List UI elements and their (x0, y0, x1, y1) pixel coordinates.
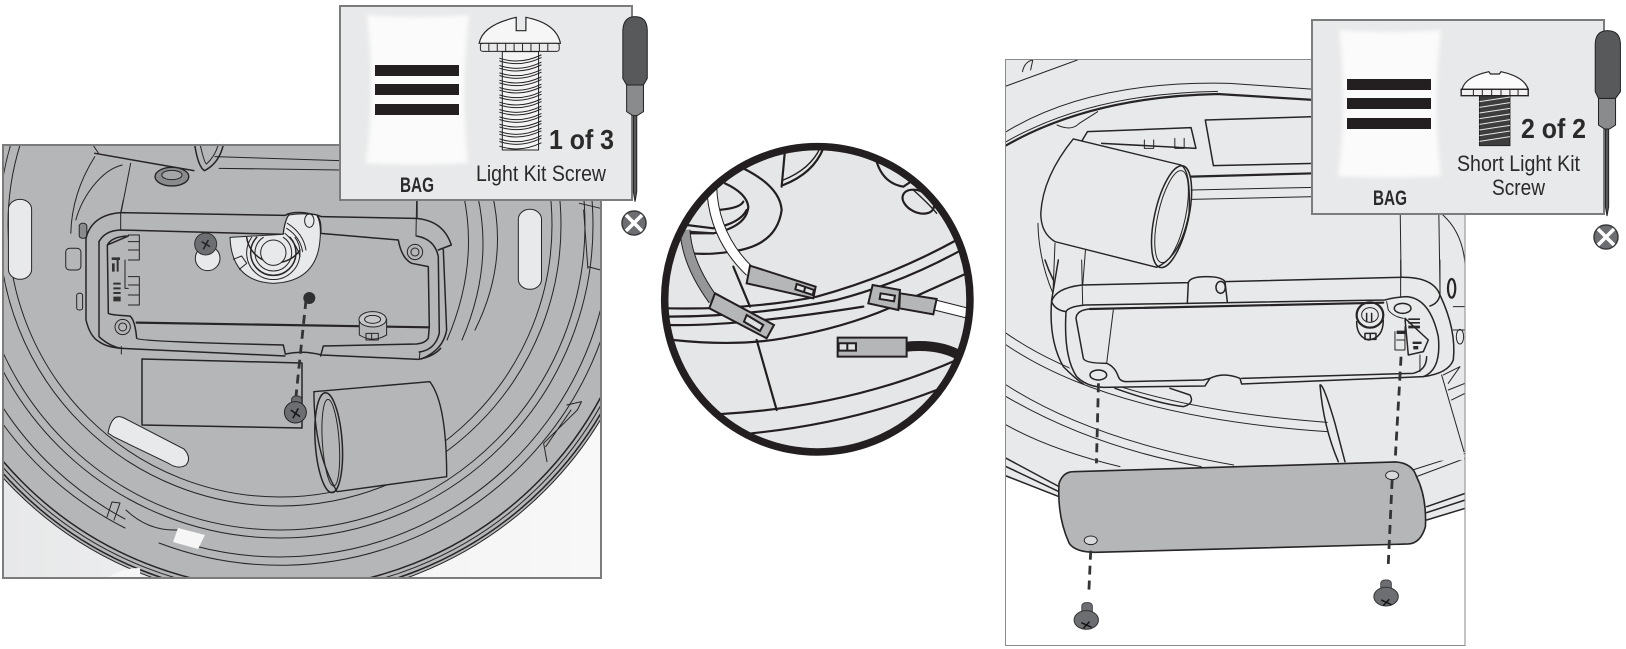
lamp socket (1041, 139, 1199, 270)
dashed guides upper (1096, 357, 1401, 463)
icon: phillips symbol 2 (1594, 225, 1618, 249)
screw name: Light Kit Screw (476, 161, 606, 186)
bag icon (366, 15, 469, 164)
icon: phillips symbol 1 (622, 211, 646, 235)
connector 3 (868, 285, 937, 314)
label rectangle (1205, 117, 1315, 166)
lamp socket (312, 382, 447, 493)
connectors and board (112, 235, 139, 305)
circuit board (1395, 318, 1428, 372)
side tab on rim (544, 402, 582, 462)
side knob (66, 223, 87, 310)
dashed guide (296, 300, 306, 396)
screw icon (1461, 72, 1528, 146)
background lines (667, 148, 967, 433)
eyelets (115, 244, 423, 335)
circle outline (665, 147, 970, 452)
dashed guides lower (1089, 480, 1392, 595)
panel frame (3, 145, 601, 578)
fixture hub (230, 214, 320, 283)
post (359, 312, 387, 340)
plate holes (1084, 471, 1399, 545)
connector 1 (747, 266, 816, 298)
count: 1 of 3 (549, 124, 614, 155)
post (1357, 302, 1383, 340)
mounting screw (195, 233, 220, 271)
screw hole (303, 292, 315, 304)
legend: light kit screw (340, 6, 632, 200)
icon: screwdriver 2 (1595, 31, 1620, 216)
upper arcs (1006, 60, 1465, 293)
white highlights on rim (108, 528, 205, 578)
right white wire (935, 305, 968, 313)
screw A (1074, 603, 1098, 629)
fixture disc (4, 146, 600, 577)
icon: screwdriver 1 (623, 17, 647, 202)
panel: wire connector detail (665, 147, 970, 452)
housing bracket (86, 200, 451, 359)
cover plate (1059, 462, 1426, 629)
fixture disc (1006, 60, 1465, 535)
second lamp socket (1320, 279, 1465, 463)
panel: left fixture underside (2, 144, 602, 579)
connector 2 (709, 293, 774, 338)
top screw boss (155, 167, 189, 186)
screw name line 2: Screw (1492, 175, 1545, 200)
upper housing lines (66, 145, 600, 310)
bag label: BAG (400, 174, 434, 197)
bag label: BAG (1373, 187, 1407, 210)
label rectangle (142, 359, 302, 428)
screw name: Short Light Kit (1457, 151, 1580, 176)
tab with slots (1081, 128, 1196, 148)
black wire (907, 346, 962, 357)
connector 4 (838, 338, 907, 357)
lower rings (1006, 333, 1465, 520)
legend: short light kit screw (1312, 20, 1604, 214)
mounting holes (1090, 303, 1411, 380)
gray wire (685, 230, 713, 300)
housing bracket (1045, 260, 1454, 407)
panel frame (1006, 60, 1465, 646)
concentric rings (4, 146, 600, 577)
count: 2 of 2 (1521, 113, 1586, 144)
bag icon (1338, 30, 1441, 178)
screw B (1374, 580, 1398, 606)
panel: right fixture with cover plate (1006, 60, 1465, 646)
screw icon (479, 17, 560, 150)
loose screw (284, 396, 306, 423)
white wire (712, 187, 750, 272)
slots (8, 199, 541, 467)
